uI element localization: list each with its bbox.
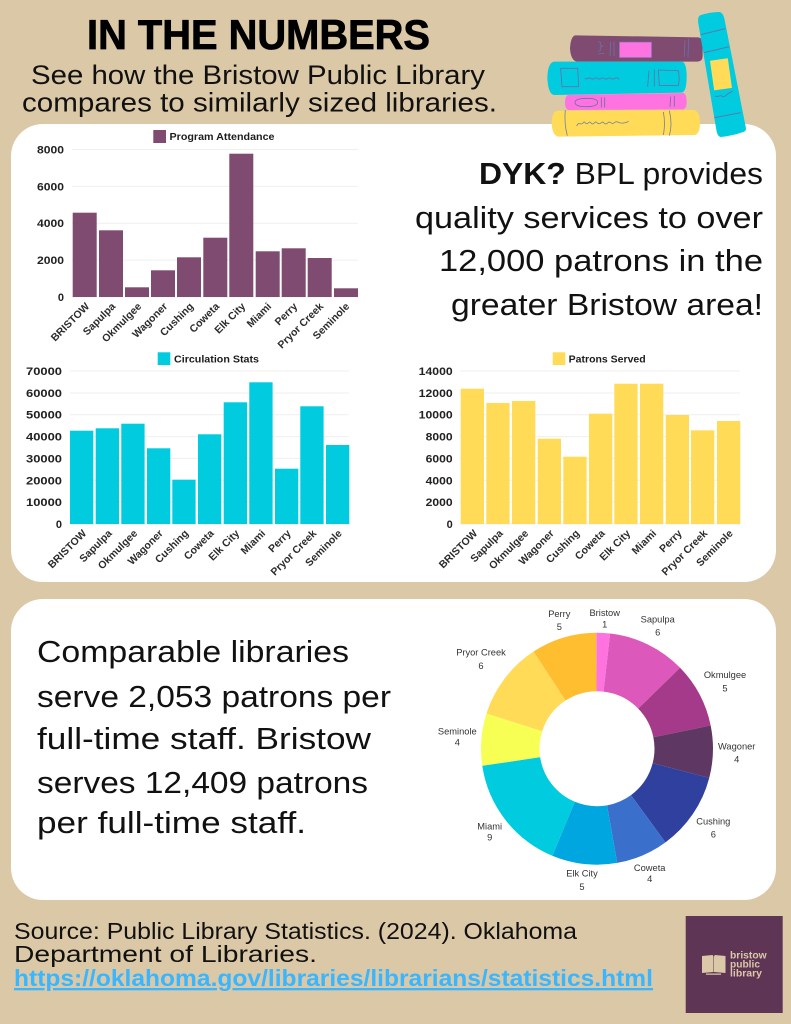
y axis labels: 0	[58, 292, 64, 304]
subtitle: compares to similarly sized libraries.	[22, 88, 497, 118]
y axis labels: 8000	[37, 144, 64, 156]
y axis labels: 40000	[26, 432, 62, 444]
icon: open book	[702, 955, 726, 975]
x axis labels: Cushing	[544, 528, 582, 566]
logo text: library	[730, 968, 762, 980]
text block: staff comparison: Comparable libraries	[37, 634, 349, 669]
y axis labels: 6000	[426, 453, 453, 465]
source citation: Source: Public Library Statistics. (2024). Oklahoma	[14, 918, 577, 944]
x axis labels	[49, 301, 352, 351]
y axis labels: 10000	[26, 497, 62, 509]
x axis labels: BRISTOW	[437, 528, 480, 571]
legend: circulation stats: Circulation Stats	[174, 354, 259, 365]
x axis labels: Elk City	[212, 301, 248, 336]
bars	[73, 154, 358, 297]
x axis labels: Seminole	[694, 528, 736, 569]
source citation	[14, 918, 653, 991]
subtitle	[22, 60, 497, 118]
x axis labels: Wagoner	[130, 301, 170, 341]
donut labels: 5	[579, 882, 585, 892]
legend: patrons served: Patrons Served	[569, 354, 646, 365]
panel: staff comparison	[11, 599, 776, 900]
x axis labels: Pryor Creek	[660, 528, 710, 578]
donut labels: Seminole	[438, 726, 477, 736]
x axis labels: Seminole	[303, 528, 345, 569]
x axis labels: Coweta	[187, 301, 222, 336]
y axis labels: 70000	[26, 366, 62, 378]
chart: program attendance	[37, 130, 358, 351]
logo: bristow public library	[686, 916, 783, 1013]
text block: staff comparison: per full-time staff.	[37, 805, 306, 840]
y axis labels: 10000	[419, 410, 453, 422]
y axis labels: 12000	[419, 388, 453, 400]
bars	[461, 384, 740, 524]
y axis labels: 2000	[426, 497, 453, 509]
y axis labels	[37, 144, 64, 304]
donut labels	[438, 608, 755, 892]
subtitle: See how the Bristow Public Library	[31, 60, 486, 90]
x axis labels: Coweta	[573, 528, 608, 563]
logo text	[730, 950, 767, 980]
x axis labels: Okmulgee	[487, 528, 531, 572]
x axis labels: Elk City	[597, 528, 633, 563]
logo text: public	[730, 959, 760, 970]
text block: staff comparison: full-time staff. Bristow	[37, 721, 372, 756]
y axis labels	[26, 366, 62, 531]
logo text: bristow	[730, 950, 767, 961]
x axis labels: Miami	[630, 528, 659, 557]
x axis labels: Okmulgee	[100, 301, 144, 345]
x axis labels	[46, 528, 345, 578]
y axis labels: 14000	[419, 366, 453, 378]
text block: staff comparison	[37, 634, 391, 840]
donut chart: full-time staff by library	[438, 608, 755, 892]
x axis labels: Miami	[245, 301, 274, 330]
x axis labels	[437, 528, 736, 578]
y axis labels: 6000	[37, 182, 64, 194]
callout: did you know	[415, 156, 763, 322]
donut labels: 4	[734, 754, 739, 764]
y axis labels: 50000	[26, 410, 62, 422]
donut labels: 5	[557, 622, 562, 632]
donut labels: Wagoner	[718, 741, 755, 751]
text block: staff comparison: serve 2,053 patrons per	[37, 679, 391, 714]
y axis labels: 0	[56, 519, 62, 531]
x axis labels: Cushing	[153, 528, 191, 566]
donut labels: 6	[478, 661, 484, 671]
x axis labels: Cushing	[158, 301, 196, 339]
chart: circulation stats	[26, 352, 349, 578]
legend: patrons served	[553, 352, 646, 365]
donut labels: Perry	[548, 609, 571, 619]
callout: did you know: DYK? BPL provides	[479, 156, 763, 191]
y axis labels: 8000	[426, 432, 453, 444]
y axis labels: 4000	[37, 218, 64, 230]
x axis labels: BRISTOW	[46, 528, 89, 571]
x axis labels: Pryor Creek	[269, 528, 319, 578]
donut labels: 9	[487, 833, 492, 843]
x axis labels: BRISTOW	[49, 301, 92, 344]
donut labels: 6	[655, 627, 660, 637]
x axis labels: Sapulpa	[468, 528, 506, 565]
y axis labels: 2000	[37, 255, 64, 267]
donut labels: Pryor Creek	[456, 648, 506, 658]
chart: patrons served	[419, 352, 740, 578]
x axis labels: Coweta	[182, 528, 217, 563]
donut labels: Elk City	[566, 869, 598, 879]
legend: circulation stats	[158, 352, 259, 365]
x axis labels: Pryor Creek	[276, 301, 326, 351]
x axis labels: Sapulpa	[81, 301, 118, 338]
y axis labels: 4000	[426, 475, 453, 487]
y axis labels: 0	[447, 519, 453, 531]
icon: stack of books	[547, 12, 746, 137]
y axis labels: 30000	[26, 453, 62, 465]
source citation: Department of Libraries.	[14, 941, 317, 967]
x axis labels: Wagoner	[126, 528, 166, 568]
x axis labels: Sapulpa	[77, 528, 115, 565]
callout: did you know: 12,000 patrons in the	[439, 243, 763, 278]
x axis labels: Okmulgee	[96, 528, 140, 572]
donut labels: Cushing	[696, 816, 730, 826]
donut labels: Sapulpa	[641, 615, 676, 625]
donut labels: 4	[647, 874, 652, 884]
donut labels: 1	[602, 619, 607, 629]
x axis labels: Elk City	[206, 528, 242, 563]
donut labels: 4	[455, 737, 460, 747]
x axis labels: Perry	[657, 528, 685, 555]
source citation: https://oklahoma.gov/libraries/librarians/statistics.html	[14, 965, 653, 991]
title: IN THE NUMBERS	[87, 11, 430, 58]
bars	[70, 382, 349, 524]
x axis labels: Seminole	[311, 301, 352, 342]
callout: did you know: greater Bristow area!	[451, 287, 763, 322]
y axis labels: 60000	[26, 388, 62, 400]
panel: charts	[11, 124, 776, 582]
y axis labels	[419, 366, 453, 531]
donut labels: Coweta	[634, 863, 666, 873]
callout: did you know: quality services to over	[415, 200, 763, 235]
donut labels: Miami	[477, 821, 502, 831]
x axis labels: Perry	[266, 528, 294, 555]
legend: program attendance	[153, 130, 275, 143]
y axis labels: 20000	[26, 475, 62, 487]
legend: program attendance: Program Attendance	[170, 132, 275, 143]
x axis labels: Perry	[273, 301, 300, 328]
donut labels: Okmulgee	[704, 670, 746, 680]
donut labels: 5	[722, 683, 728, 693]
x axis labels: Miami	[239, 528, 268, 557]
text block: staff comparison: serves 12,409 patrons	[37, 765, 368, 800]
donut labels: 6	[711, 830, 716, 840]
x axis labels: Wagoner	[517, 528, 557, 568]
donut labels: Bristow	[589, 608, 620, 618]
